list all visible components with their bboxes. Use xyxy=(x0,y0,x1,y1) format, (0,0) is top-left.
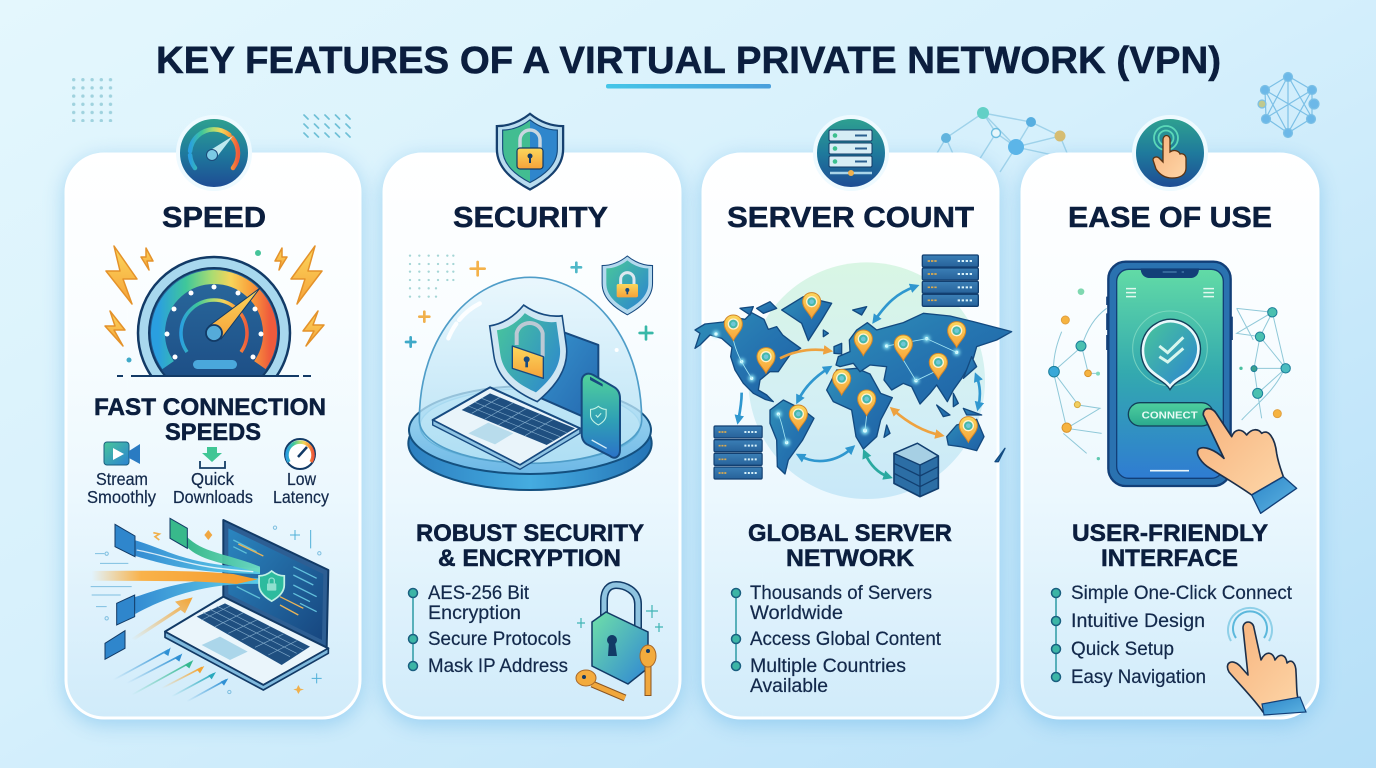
title underline xyxy=(606,84,771,88)
icon: gauge badge xyxy=(178,117,250,189)
bullet list xyxy=(1052,583,1293,688)
decoration: network behind cards xyxy=(930,107,1076,172)
decorative sparks xyxy=(126,250,261,362)
subheading: SPEEDS xyxy=(165,419,261,446)
label: quick downloads xyxy=(173,469,253,507)
label: low latency xyxy=(273,469,329,507)
icon: shield badge xyxy=(497,114,563,189)
card background xyxy=(703,154,998,718)
bullet list: Easy Navigation xyxy=(1071,667,1206,688)
illustration: speedometer xyxy=(117,256,311,377)
card background xyxy=(384,154,680,718)
illustration: laptop under glass dome xyxy=(406,254,653,490)
heading: SECURITY xyxy=(453,202,608,234)
illustration: world map with servers xyxy=(695,255,1012,499)
decoration: network top right xyxy=(1258,72,1319,138)
bullet list: Available xyxy=(750,676,828,697)
heading: SPEED xyxy=(162,202,266,234)
bullet list: Access Global Content xyxy=(750,629,942,650)
label: low latency: Low xyxy=(287,469,316,489)
panel: ease of use xyxy=(1022,117,1318,718)
panel: security xyxy=(384,114,680,718)
icon: download xyxy=(200,447,225,468)
subheading xyxy=(94,394,326,446)
bullet list: Mask IP Address xyxy=(428,656,568,677)
bullet list: Quick Setup xyxy=(1071,639,1174,660)
icon: touch badge xyxy=(1134,117,1206,189)
icon: lightning bolts xyxy=(105,246,324,346)
subheading: & ENCRYPTION xyxy=(438,545,621,572)
illustration: laptop with data streams xyxy=(91,518,328,702)
icon: video xyxy=(104,442,140,465)
title: KEY FEATURES OF A VIRTUAL PRIVATE NETWORK (VPN) xyxy=(156,40,1221,82)
bullet list: Multiple Countries xyxy=(750,656,906,677)
subheading: GLOBAL SERVER xyxy=(748,520,952,547)
bullet list: Thousands of Servers xyxy=(750,583,932,604)
illustration: phone with connect button xyxy=(1049,262,1297,513)
panel: speed xyxy=(66,117,360,718)
heading: SERVER COUNT xyxy=(727,202,974,234)
label: stream smoothly: Stream xyxy=(96,469,148,489)
subheading xyxy=(748,520,952,572)
heading: EASE OF USE xyxy=(1068,202,1272,234)
icon: tapping hand xyxy=(1227,608,1306,715)
label: quick downloads: Quick xyxy=(191,469,234,489)
bullet list: Simple One-Click Connect xyxy=(1071,583,1293,604)
panel: server count xyxy=(695,117,1012,718)
label: low latency: Latency xyxy=(273,487,329,507)
decoration: slanted dashes xyxy=(302,114,351,141)
subheading: INTERFACE xyxy=(1101,545,1238,572)
bullet list: Worldwide xyxy=(750,603,843,624)
subheading xyxy=(1072,520,1268,572)
icon: server badge xyxy=(815,117,887,189)
subheading: ROBUST SECURITY xyxy=(416,520,644,547)
bullet list: AES-256 Bit xyxy=(428,583,530,604)
card background xyxy=(66,154,360,718)
bullet list: Secure Protocols xyxy=(428,629,571,650)
label: stream smoothly xyxy=(87,469,156,507)
subheading: NETWORK xyxy=(786,545,915,572)
icon: small gauge xyxy=(285,439,315,469)
illustration: phone with connect button: CONNECT xyxy=(1142,410,1198,421)
subheading: FAST CONNECTION xyxy=(94,394,326,421)
subheading xyxy=(416,520,644,572)
card background xyxy=(1022,154,1318,718)
bullet list: Encryption xyxy=(428,603,521,624)
decoration: dot grid xyxy=(72,78,113,122)
icon: padlock and keys xyxy=(576,585,663,698)
label: quick downloads: Downloads xyxy=(173,487,253,507)
bullet list xyxy=(408,583,571,677)
subheading: USER-FRIENDLY xyxy=(1072,520,1268,547)
bullet list xyxy=(732,583,942,697)
bullet list: Intuitive Design xyxy=(1071,611,1205,632)
label: stream smoothly: Smoothly xyxy=(87,487,156,507)
